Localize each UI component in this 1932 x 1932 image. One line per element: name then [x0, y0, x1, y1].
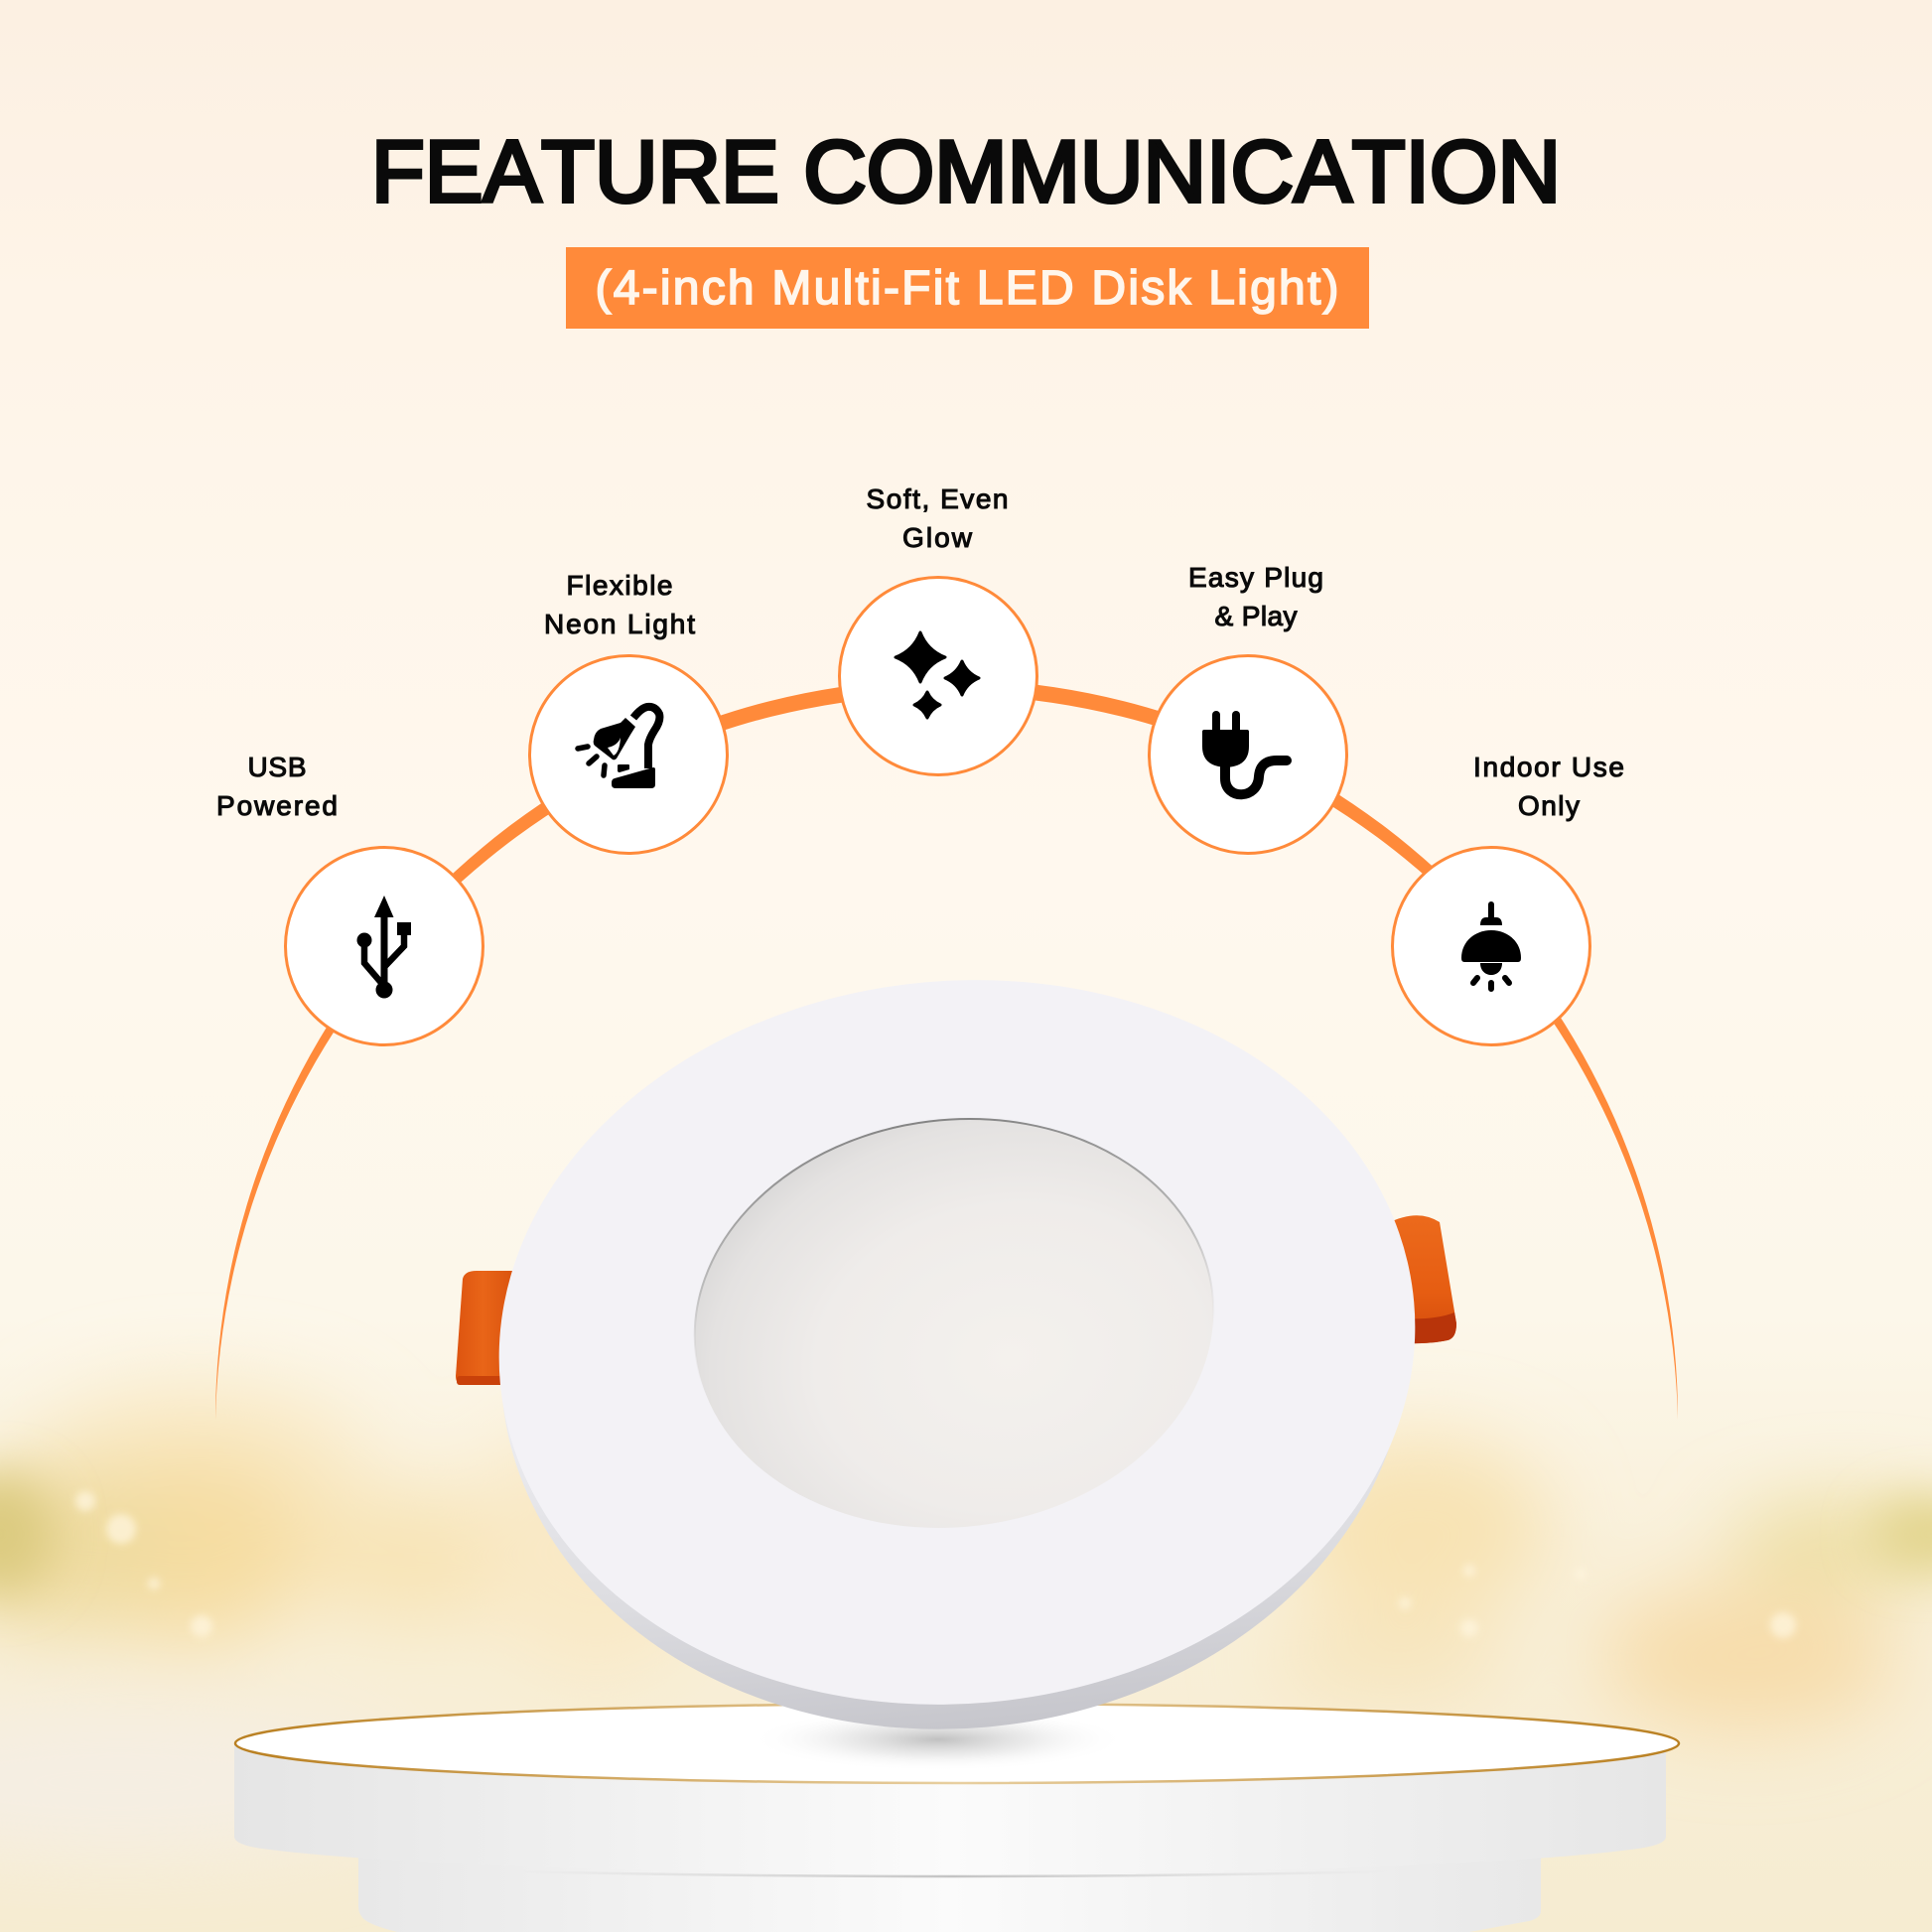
- feature: USB Powered: [216, 752, 483, 1044]
- feature: Easy Plug & Play: [1150, 562, 1346, 854]
- label: Soft, Even Glow: Glow: [902, 522, 973, 553]
- feature: Soft, Even Glow: [840, 483, 1036, 774]
- podium tier shadow: [516, 1871, 1390, 1876]
- icon: pendant lamp: [1461, 901, 1521, 989]
- label: USB Powered: USB: [248, 752, 306, 782]
- icon: plug with cord: [1202, 711, 1287, 794]
- feature: Flexible Neon Light: [530, 570, 727, 854]
- podium shadow: [750, 1708, 1127, 1771]
- label: Easy Plug & Play: Easy Plug: [1188, 562, 1323, 593]
- subtitle banner: [566, 247, 1369, 329]
- circle: USB: [286, 848, 483, 1044]
- right clip: [1388, 1215, 1456, 1343]
- LED disk light: [456, 942, 1456, 1766]
- podium top: [235, 1704, 1679, 1783]
- podium: [234, 1704, 1679, 1932]
- label: Easy Plug & Play: [1188, 562, 1323, 631]
- label: Indoor Use Only: [1473, 752, 1624, 821]
- label: Flexible Neon Light: Flexible: [566, 570, 673, 601]
- circle: plug: [1150, 655, 1346, 854]
- icon: sparkles: [896, 632, 979, 718]
- title: FEATURE COMMUNICATION: [371, 122, 1561, 220]
- podium upper tier side: [234, 1742, 1666, 1874]
- circle: sparkle: [840, 578, 1036, 774]
- circle: lamp: [530, 655, 727, 854]
- label: Easy Plug & Play: & Play: [1215, 601, 1297, 631]
- disk edge: [470, 946, 1439, 1766]
- subtitle banner: (4-inch Multi-Fit LED Disk Light): [596, 262, 1338, 315]
- label: Flexible Neon Light: Neon Light: [544, 609, 695, 639]
- podium lower tier: [358, 1847, 1541, 1932]
- left clip: [456, 1271, 516, 1385]
- diffuser lens: [671, 1090, 1237, 1557]
- label: Indoor Use Only: Only: [1518, 790, 1580, 821]
- icon: USB symbol: [357, 896, 411, 999]
- label: USB Powered: Powered: [216, 790, 338, 821]
- label: Indoor Use Only: Indoor Use: [1473, 752, 1624, 782]
- orange feature arc: [215, 679, 1678, 1420]
- feature: Indoor Use Only: [1392, 752, 1624, 1044]
- icon: desk lamp: [578, 707, 659, 788]
- disk face: [469, 942, 1446, 1742]
- label: Soft, Even Glow: [866, 483, 1009, 553]
- label: Flexible Neon Light: [544, 570, 695, 639]
- label: USB Powered: [216, 752, 338, 821]
- circle: pendant lamp: [1392, 848, 1590, 1044]
- label: Soft, Even Glow: Soft, Even: [866, 483, 1009, 514]
